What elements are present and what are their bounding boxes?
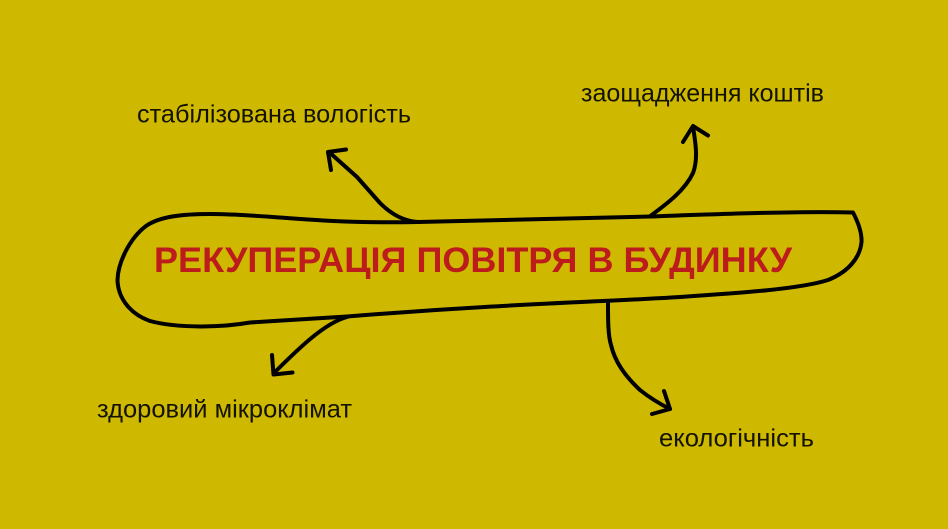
label: cost savings: заощадження коштів — [581, 80, 824, 108]
arrow: to savings — [651, 126, 708, 216]
label: eco-friendliness: екологічність — [659, 424, 814, 452]
central outline shape — [118, 212, 862, 326]
label: healthy microclimate: здоровий мікроклімат — [97, 396, 353, 424]
arrow: to ecology — [608, 302, 670, 414]
label: stabilized humidity: стабілізована вологість — [137, 100, 411, 128]
arrow: to microclimate — [272, 317, 347, 374]
title: РЕКУПЕРАЦІЯ ПОВІТРЯ В БУДИНКУ — [154, 240, 793, 280]
arrow: to humidity — [328, 150, 418, 222]
